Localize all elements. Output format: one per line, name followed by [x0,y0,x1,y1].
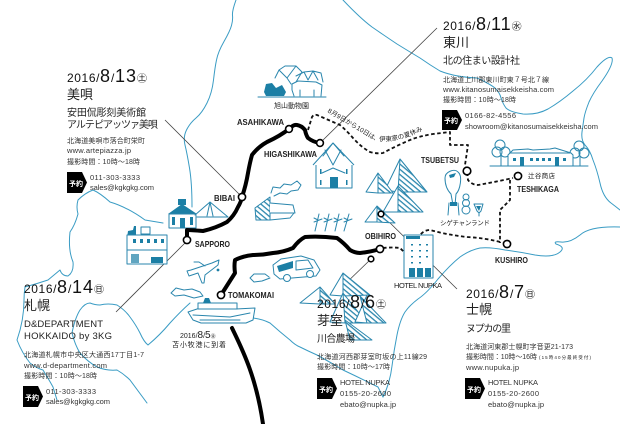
panel: 8/11 Higashikawa: showroom@kitanosumaisekkeisha.com [465,122,598,131]
panel: 8/14 Sapporo: 撮影時間：10時〜18時 [24,371,97,380]
icon: tent mountain [195,202,228,217]
city labels [195,117,559,300]
icon: Higashikawa house [313,143,354,188]
panel: 8/13 Bibai: www.artepiazza.jp [66,146,131,155]
panel: 8/6 Memuro: 北海道河西郡芽室町坂の上11線29 [317,352,427,361]
panel: 8/14 Sapporo: 札幌 [24,298,50,313]
panel: 8/14 Sapporo: www.d-department.com [23,361,107,370]
panel: 8/6 Memuro [317,292,427,409]
icon: Sapporo clock tower [168,199,197,228]
panel: 8/6 Memuro: HOTEL NUPKA [340,378,390,387]
panel: 8/13 Bibai: 美唄 [67,87,93,102]
city labels: ASAHIKAWA [237,117,284,127]
icon: Asahiyama zoo [258,66,326,97]
leader lines [116,28,457,312]
panel: 8/13 Bibai: 北海道美唄市落合町栄町 [67,136,145,145]
panel: 8/7 Shihoro: HOTEL NUPKA [488,378,538,387]
city labels: KUSHIRO [495,255,528,265]
panel: 8/11 Higashikawa: 0166-82-4556 [465,111,516,120]
panel: 8/6 Memuro: 0155-20-2600 [340,389,391,398]
panel: 8/14 Sapporo: 予約 [25,393,39,402]
panel: 8/14 Sapporo: 2016/8/14㊐ [24,277,105,297]
city labels: TOMAKOMAI [228,290,274,300]
panel: 8/13 Bibai: 2016/8/13㊏ [67,66,148,86]
panel: 8/13 Bibai: アルテピアッツァ美唄 [67,118,158,131]
panel: 8/14 Sapporo: D&DEPARTMENT [24,319,103,330]
panel: 8/7 Shihoro: 0155-20-2600 [488,389,539,398]
panel: 8/7 Shihoro: 予約 [467,385,481,394]
icon: Tsujiya shop and trees [490,140,589,166]
icon: airplane [187,260,219,283]
icon: ferry with smoke [171,288,255,323]
panel: 8/6 Memuro: 2016/8/6㊏ [317,292,387,312]
label: Tsujiya shop: 辻谷商店 [528,171,556,180]
panel: 8/14 Sapporo: 北海道札幌市中央区大通西17丁目1-7 [24,350,144,359]
panel: 8/14 Sapporo: HOKKAIDO by 3KG [24,331,112,342]
panel: 8/6 Memuro: 芽室 [317,313,343,328]
solid route: ferry arrival [232,328,263,424]
icon: Shigechan characters [445,170,483,216]
icon: mountains near Shihoro [300,273,386,340]
panel: 8/11 Higashikawa: 東川 [443,35,469,50]
panel: 8/13 Bibai: 撮影時間：10時〜18時 [67,157,140,166]
city labels: TSUBETSU [421,155,459,165]
panel: 8/7 Shihoro: 2016/8/7㊐ [466,282,536,302]
city labels: TESHIKAGA [517,184,559,194]
panel: 8/11 Higashikawa: 撮影時間：10時〜18時 [443,95,516,104]
panel: 8/6 Memuro: 予約 [319,385,333,394]
label: Asahiyama zoo: 旭山動物園 [274,101,309,110]
panel: 8/6 Memuro: 撮影時間：10時〜17時 [317,362,390,371]
panel: 8/11 Higashikawa: 予約 [444,116,458,125]
panel: 8/14 Sapporo: sales@kgkgkg.com [46,397,110,406]
icon: Hotel Nupka building [404,235,433,278]
panel: 8/11 Higashikawa: www.kitanosumaisekkeisha.com [442,85,554,94]
icon: wheat field [314,214,352,231]
panel: 8/13 Bibai [66,66,158,193]
panel: 8/7 Shihoro [465,282,592,409]
city labels: OBIHIRO [365,231,396,241]
solid route: Sapporo to Higashikawa [187,125,320,240]
panel: 8/6 Memuro: ebato@nupka.jp [340,400,396,409]
panel: 8/7 Shihoro: (15時40分最終受付) [539,354,592,361]
panel: 8/11 Higashikawa [442,14,598,131]
panel: 8/14 Sapporo: 011-303-3333 [46,387,96,396]
panel: 8/7 Shihoro: www.nupuka.jp [465,363,519,372]
panel: 8/14 Sapporo [23,277,144,407]
panel: 8/11 Higashikawa: 2016/8/11㊌ [443,14,522,34]
city labels: SAPPORO [195,239,230,249]
city labels: HIGASHIKAWA [264,149,317,159]
icon: mountains near Obihiro [365,159,427,223]
stops [183,126,522,299]
icon: bus with exhaust [250,256,320,282]
icon: D&DEPARTMENT building [127,226,167,264]
callout: arrival 8/5 [172,330,226,349]
icon: log cabin with smoke [255,181,301,220]
panel: 8/7 Shihoro: 撮影時間：10時〜16時 [466,352,537,361]
panel: 8/7 Shihoro: 北海道河東郡士幌町字音更21-173 [466,342,573,351]
panel: 8/7 Shihoro: ヌプカの里 [466,323,511,335]
panel: 8/7 Shihoro: 士幌 [466,302,492,317]
label: Shigechan Land: シゲチャンランド [440,218,490,227]
panel: 8/6 Memuro: 川合農場 [317,332,355,345]
panel: 8/13 Bibai: 011-303-3333 [90,173,140,182]
city labels: BIBAI [214,193,235,203]
dashed route: eastern loop [308,115,513,252]
label: Hotel Nupka: HOTEL NUPKA [394,281,442,290]
panel: 8/13 Bibai: 安田侃彫刻美術館 [67,106,146,119]
panel: 8/7 Shihoro: ebato@nupka.jp [488,400,544,409]
panel: 8/13 Bibai: sales@kgkgkg.com [90,183,154,192]
panel: 8/11 Higashikawa: 北海道上川郡東川町東７号北７線 [443,75,549,84]
panel: 8/13 Bibai: 予約 [69,179,83,188]
note along dashed route: 8月9日から10日は、伊東家の夏休み [328,108,422,142]
callout: arrival 8/5: 2016/8/5㊎ [180,330,216,341]
callout: arrival 8/5: 苫小牧港に到着 [172,340,226,349]
panel: 8/11 Higashikawa: 北の住まい設計社 [443,54,520,67]
solid route: Tomakomai to Obihiro [221,237,380,295]
